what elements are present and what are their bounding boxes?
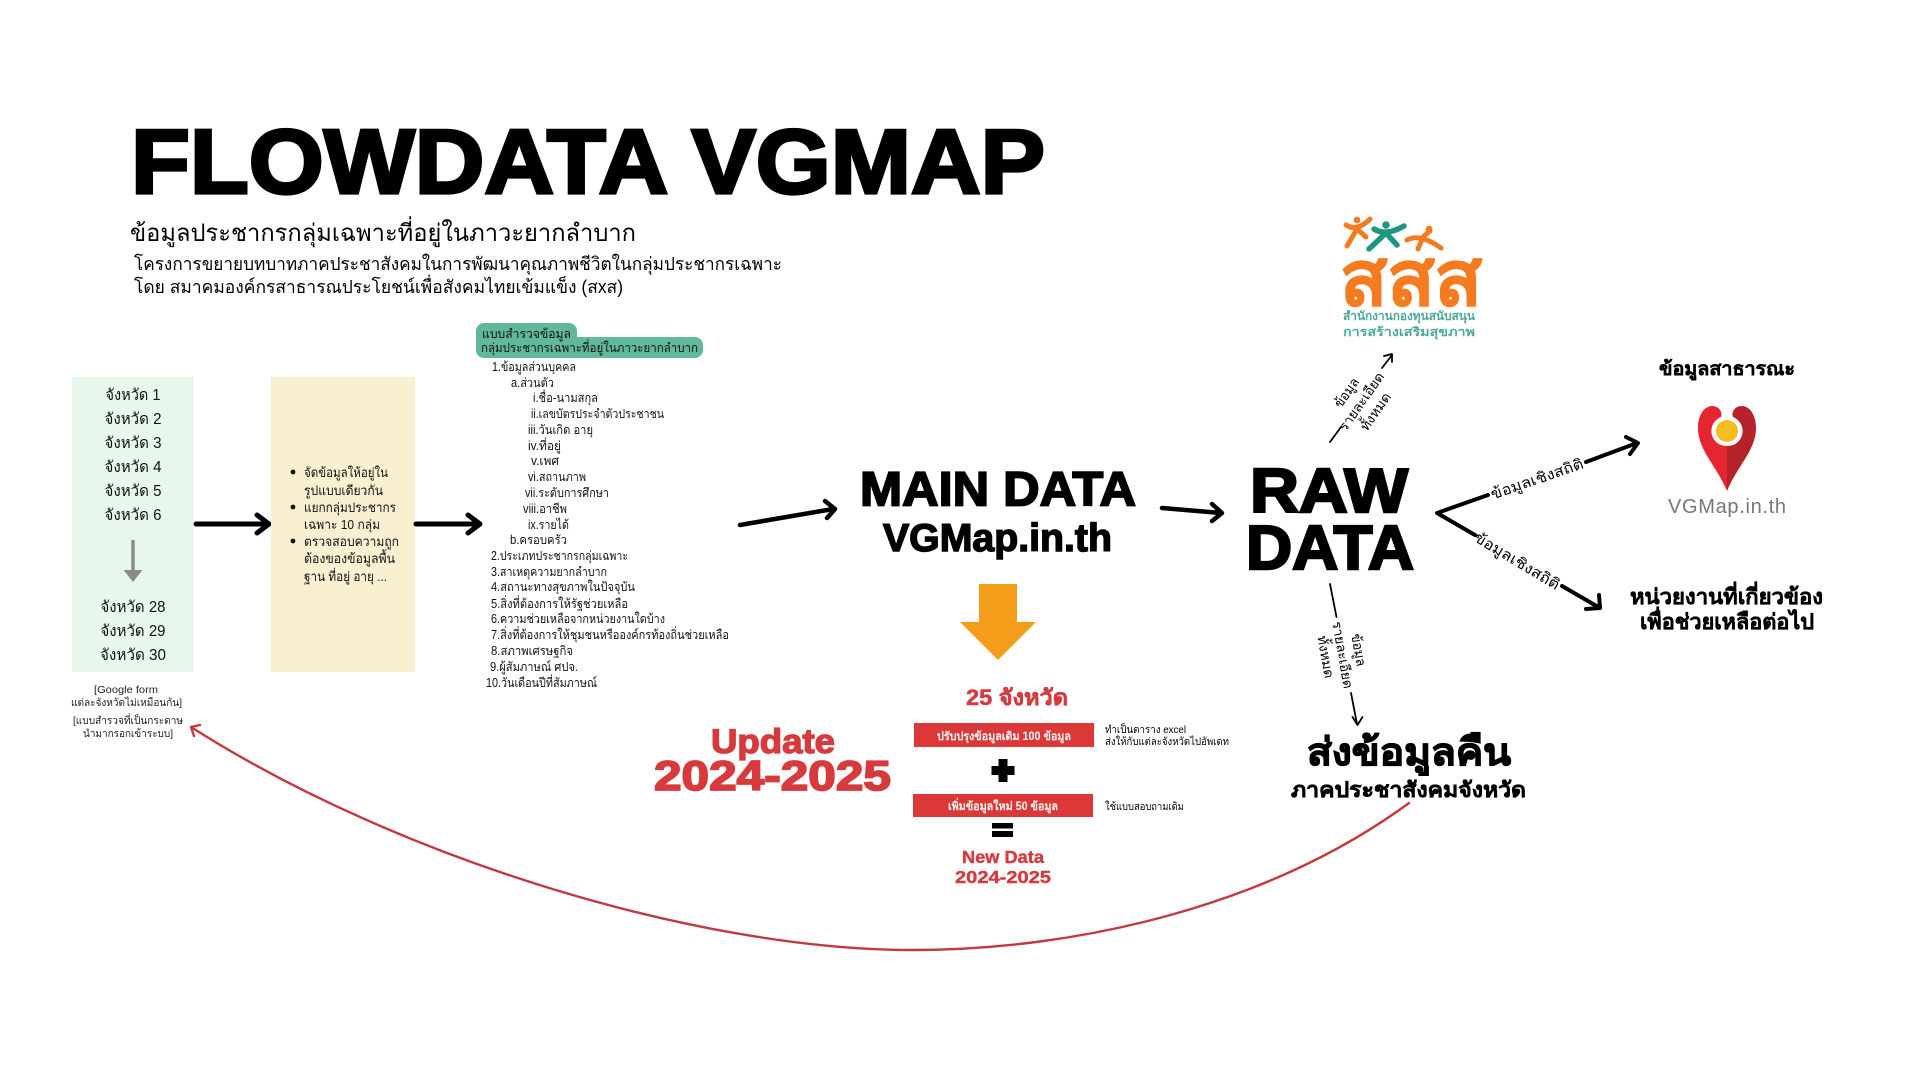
panel: survey outline: 7.สิ่งที่ต้องการให้ชุมชนหรือองค์กรท้องถิ่นช่วยเหลือ <box>491 626 729 643</box>
panel: survey outline: 10.วันเดือนปีที่สัมภาษณ์ <box>486 674 597 690</box>
panel: provinces <box>72 377 194 672</box>
arrow: raw data to return data: รายละเอียด <box>1329 620 1356 690</box>
subtitle block <box>130 216 782 297</box>
label: VGMap.in.th: VGMap.in.th <box>1668 496 1786 518</box>
bar: update 100 records <box>914 723 1094 747</box>
heading: raw data: RAW <box>1250 457 1409 526</box>
caption: data sources: แต่ละจังหวัดไม่เหมือนกัน] <box>71 696 182 709</box>
panel: survey outline: vi.สถานภาพ <box>528 470 586 484</box>
heading: related agencies <box>1630 581 1823 634</box>
caption: data sources: นำมากรอกเข้าระบบ] <box>83 728 173 740</box>
panel: provinces: จังหวัด 1 <box>106 387 160 404</box>
panel: survey outline: vii.ระดับการศึกษา <box>525 486 609 500</box>
panel: data cleaning: ฐาน ที่อยู่ อายุ ... <box>304 568 387 585</box>
heading: update years: 2024-2025 <box>654 752 891 799</box>
heading: raw data <box>1246 457 1414 583</box>
panel: data cleaning <box>271 377 415 672</box>
panel: survey outline: iii.วันเกิด อายุ <box>528 423 593 438</box>
panel: data cleaning: ต้องของข้อมูลพื้น <box>304 549 395 567</box>
heading: return data: ส่งข้อมูลคืน <box>1307 732 1511 776</box>
icon: orange down arrow <box>960 584 1036 660</box>
panel: survey outline: 1.ข้อมูลส่วนบุคคล <box>492 360 576 375</box>
heading: main data: MAIN DATA <box>860 464 1136 516</box>
bar: add 50 records: เพิ่มข้อมูลใหม่ 50 ข้อมูล <box>948 797 1058 814</box>
panel: provinces: จังหวัด 30 <box>100 647 166 664</box>
heading: return data: ภาคประชาสังคมจังหวัด <box>1291 778 1526 802</box>
panel: provinces: จังหวัด 3 <box>104 435 162 452</box>
panel: survey outline: 2.ประเภทประชากรกลุ่มเฉพาะ <box>491 549 628 564</box>
panel: provinces: จังหวัด 28 <box>100 599 166 616</box>
panel: survey outline: 4.สถานะทางสุขภาพในปัจจุบัน <box>491 580 635 595</box>
caption: data sources: [แบบสำรวจที่เป็นกระดาษ <box>73 713 183 727</box>
panel: survey outline: i.ชื่อ-นามสกุล <box>533 389 598 406</box>
panel: survey outline: 5.สิ่งที่ต้องการให้รัฐช่วยเหลือ <box>491 595 628 611</box>
panel: data cleaning: จัดข้อมูลให้อยู่ใน <box>304 465 388 481</box>
logo: ThaiHealth <box>1340 217 1483 340</box>
panel: data cleaning: รูปแบบเดียวกัน <box>304 483 383 499</box>
panel: survey outline: b.ครอบครัว <box>510 533 567 547</box>
arrow: provinces to cleaning <box>196 515 269 533</box>
survey heading tag: กลุ่มประชากรเฉพาะที่อยู่ในภาวะยากลำบาก <box>481 339 698 356</box>
panel: survey outline: v.เพศ <box>531 454 559 468</box>
logo: ThaiHealth: สสส <box>1340 237 1483 322</box>
logo: ThaiHealth: สำนักงานกองทุนสนับสนุน <box>1343 309 1476 324</box>
note: excel table: ทำเป็นตาราง excel <box>1105 722 1186 736</box>
title: FLOWDATA VGMAP <box>131 112 1045 213</box>
panel: provinces: จังหวัด 2 <box>104 411 162 428</box>
panel: survey outline: a.ส่วนตัว <box>511 376 554 390</box>
subtitle block: โดย สมาคมองค์กรสาธารณประโยชน์เพื่อสังคมไทยเข้มแข็ง (สxส) <box>134 274 623 297</box>
subtitle block: ข้อมูลประชากรกลุ่มเฉพาะที่อยู่ในภาวะยากลำบาก <box>130 216 636 248</box>
panel: data cleaning: เฉพาะ 10 กลุ่ม <box>304 517 380 533</box>
panel: survey outline: 9.ผู้สัมภาษณ์ ศปจ. <box>490 660 578 675</box>
icon: VGMap pin <box>1698 406 1756 491</box>
survey heading tag <box>476 323 703 358</box>
arrow: raw data to ThaiHealth: ทั้งหมด <box>1355 388 1394 434</box>
note: excel table <box>1105 722 1229 748</box>
arrow: raw data to return data <box>1314 584 1369 725</box>
icon: grey down arrow <box>124 540 142 582</box>
panel: survey outline <box>476 323 729 690</box>
panel: survey outline: 3.สาเหตุความยากลำบาก <box>491 565 607 580</box>
arrow: raw data to agencies: ข้อมูลเชิงสถิติ <box>1471 529 1563 594</box>
arrow: cleaning to survey <box>416 515 480 533</box>
arrow: raw data to return data: ข้อมูล <box>1347 632 1369 668</box>
panel: survey outline: ix.รายได้ <box>528 518 569 532</box>
subtitle block: โครงการขยายบทบาทภาคประชาสังคมในการพัฒนาคุณภาพชีวิตในกลุ่มประชากรเฉพาะ <box>134 253 782 275</box>
label: new data: New Data <box>962 847 1044 867</box>
panel: provinces: จังหวัด 29 <box>100 623 166 640</box>
heading: raw data: DATA <box>1246 514 1414 583</box>
bar: add 50 records <box>913 794 1093 817</box>
survey heading tag: แบบสำรวจข้อมูล <box>482 327 571 342</box>
icon: plus <box>992 759 1014 782</box>
heading: update years: Update <box>711 723 835 761</box>
arrow: raw data to ThaiHealth: รายละเอียด <box>1336 370 1387 434</box>
icon: equals <box>992 823 1013 837</box>
arrow: survey to main data <box>740 501 835 525</box>
heading: main data <box>860 464 1136 560</box>
panel: survey outline: ii.เลขบัตรประจำตัวประชาชน <box>531 407 664 421</box>
panel: data cleaning: แยกกลุ่มประชากร <box>304 500 396 516</box>
panel: survey outline: 8.สภาพเศรษฐกิจ <box>491 644 573 658</box>
heading: public data: ข้อมูลสาธารณะ <box>1659 358 1795 381</box>
panel: survey outline: iv.ที่อยู่ <box>528 437 561 454</box>
panel: survey outline: viii.อาชีพ <box>523 502 567 516</box>
panel: provinces: จังหวัด 6 <box>104 507 162 524</box>
panel: provinces: จังหวัด 5 <box>104 483 162 500</box>
caption: data sources <box>71 684 183 740</box>
heading: related agencies: หน่วยงานที่เกี่ยวข้อง <box>1630 581 1823 609</box>
panel: data cleaning: ตรวจสอบความถูก <box>304 534 399 550</box>
arrow: raw data to agencies <box>1471 529 1600 609</box>
heading: return data <box>1291 732 1526 802</box>
caption: data sources: [Google form <box>94 684 158 696</box>
panel: survey outline: 6.ความช่วยเหลือจากหน่วยงานใดบ้าง <box>491 612 665 626</box>
panel: provinces: จังหวัด 4 <box>104 459 162 476</box>
heading: 25 provinces: 25 จังหวัด <box>966 685 1068 710</box>
bar: update 100 records: ปรับปรุงข้อมูลเดิม 100 ข้อมูล <box>937 730 1071 744</box>
arrow: raw data to ThaiHealth: ข้อมูล <box>1331 375 1363 411</box>
logo: ThaiHealth: การสร้างเสริมสุขภาพ <box>1343 325 1475 340</box>
label: new data <box>955 847 1051 887</box>
heading: update years <box>654 723 891 799</box>
arrow: main data to raw data <box>1162 504 1222 521</box>
arrow: feedback loop to provinces <box>191 725 1409 950</box>
heading: related agencies: เพื่อช่วยเหลือต่อไป <box>1640 606 1814 634</box>
label: new data: 2024-2025 <box>955 867 1051 887</box>
arrow: raw data to ThaiHealth <box>1330 354 1394 442</box>
arrow: raw data to return data: ทั้งหมด <box>1314 634 1340 679</box>
arrow: raw data to public map: ข้อมูลเชิงสถิติ <box>1489 456 1586 503</box>
heading: main data: VGMap.in.th <box>883 517 1112 560</box>
note: excel table: ส่งให้กับแต่ละจังหวัดไปอัพเดท <box>1105 735 1229 748</box>
arrow: raw data to public map <box>1437 437 1638 535</box>
note: same questionnaire: ใช้แบบสอบถามเดิม <box>1105 800 1184 813</box>
icon: three figures <box>1346 217 1441 249</box>
